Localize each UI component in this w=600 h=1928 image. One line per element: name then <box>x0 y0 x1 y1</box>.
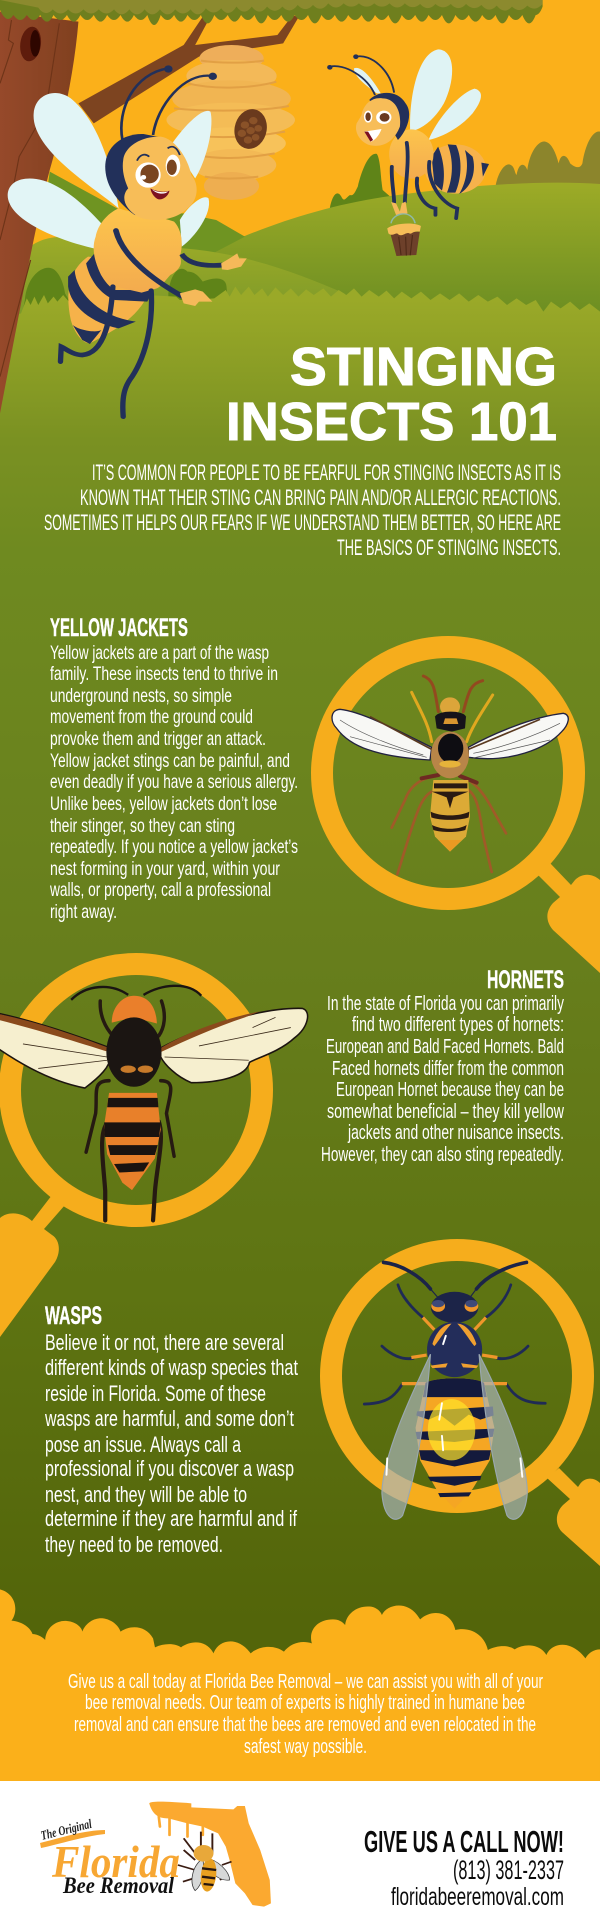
text block: yellow jackets description: right away. <box>50 901 117 923</box>
magnifying glass: hornet <box>0 964 262 1337</box>
text block: yellow jackets description: Yellow jacket stings can be painful, and <box>50 750 290 772</box>
abdomen <box>425 144 486 194</box>
illustration: wasp insect <box>364 1262 545 1519</box>
beehive <box>166 45 295 200</box>
legs <box>86 1001 174 1220</box>
logo swoosh <box>40 1830 105 1848</box>
face <box>135 147 180 199</box>
legs <box>60 287 152 417</box>
text block: yellow jackets description: family. These insects tend to thrive in <box>50 663 278 685</box>
thorax <box>389 129 434 179</box>
abdomen <box>430 780 470 852</box>
intro paragraph <box>44 460 561 560</box>
illustration: hornet insect <box>0 986 308 1220</box>
grass ridge <box>0 287 600 337</box>
thorax <box>427 1322 482 1377</box>
fluffy thorax <box>94 208 182 293</box>
antennae <box>121 68 212 140</box>
antennae <box>383 1262 527 1299</box>
text block: yellow jackets description: movement from the ground could <box>50 706 253 728</box>
tree branch <box>78 15 298 123</box>
arm right <box>182 254 224 265</box>
text block: yellow jackets description: walls, or property, call a professional <box>49 879 271 901</box>
text block: wasps description: they need to be removed. <box>45 1532 223 1557</box>
panel: hornets text <box>321 966 564 1166</box>
panel: wasps text <box>44 1302 299 1557</box>
hands <box>180 253 247 306</box>
text block: wasps description: determine if they are harmful and if <box>45 1506 298 1531</box>
head <box>431 1292 478 1323</box>
magnifying glass: yellow jacket <box>322 647 600 973</box>
small flying bee <box>327 49 489 256</box>
antennae <box>71 986 201 1000</box>
heading: wasps: WASPS <box>45 1302 102 1330</box>
right hill <box>207 183 600 320</box>
antennae <box>330 56 394 95</box>
text block: yellow jackets description: underground nests, so simple <box>50 685 232 707</box>
wings <box>0 1008 308 1088</box>
magnifying glass: wasp <box>331 1250 600 1566</box>
thorax <box>431 732 469 778</box>
logo: Florida Bee Removal: Florida <box>51 1836 180 1887</box>
head <box>112 996 157 1023</box>
abdomen <box>416 1378 494 1509</box>
honey bucket <box>387 214 421 256</box>
abdomen <box>104 1093 161 1190</box>
bushes beside big bee <box>23 268 228 310</box>
heading: yellow jackets: YELLOW JACKETS <box>50 614 188 642</box>
text block: yellow jackets description: Unlike bees, yellow jackets don’t lose <box>50 793 277 815</box>
back left hill <box>46 172 245 267</box>
text block: hornets description <box>321 993 564 1166</box>
wings <box>354 49 481 140</box>
text block: yellow jackets description: provoke them and trigger an attack. <box>50 728 266 750</box>
dark green bush behind hill <box>329 154 394 217</box>
text block: yellow jackets description <box>49 642 298 923</box>
text block: yellow jackets description: Yellow jackets are a part of the wasp <box>50 642 269 664</box>
text block: wasps description: different kinds of wasp species that <box>45 1355 299 1380</box>
title: INSECTS 101 <box>226 392 557 452</box>
logo: Florida Bee Removal <box>39 1802 271 1907</box>
tree trunk <box>0 12 78 413</box>
abdomen <box>68 257 151 343</box>
text block: yellow jackets description: even deadly if you have a serious allergy. <box>50 771 298 793</box>
legs <box>364 1285 545 1404</box>
olive bushes on horizon <box>496 132 600 193</box>
illustration: yellow jacket insect <box>332 676 568 874</box>
wings <box>8 93 211 248</box>
text block: wasps description <box>44 1330 299 1557</box>
translucent wings <box>382 1354 527 1519</box>
hive entrance <box>232 107 270 151</box>
hero illustration scene <box>0 0 600 417</box>
text block: wasps description: pose an issue. Always call a <box>45 1432 241 1457</box>
text block: yellow jackets description: nest forming in your yard, within your <box>50 858 280 880</box>
panel: yellow jackets text <box>49 614 298 923</box>
call to action text <box>68 1671 543 1758</box>
big bee <box>8 65 247 417</box>
limbs <box>392 143 457 218</box>
title <box>226 337 557 452</box>
logo bee <box>178 1832 232 1892</box>
thorax <box>106 1017 161 1087</box>
text block: wasps description: reside in Florida. Some of these <box>45 1381 266 1406</box>
head <box>105 134 161 217</box>
tree hole <box>18 26 43 62</box>
title: STINGING <box>290 337 557 397</box>
text block: wasps description: professional if you discover a wasp <box>45 1456 294 1481</box>
logo: Florida Bee Removal: Bee Removal <box>62 1873 175 1898</box>
footer: white contact strip <box>0 1781 600 1928</box>
text block: wasps description: wasps are harmful, and some don’t <box>44 1406 295 1431</box>
left hill <box>15 237 344 327</box>
footer band: scalloped orange call to action <box>0 1589 600 1782</box>
contact details <box>364 1824 564 1911</box>
hands <box>391 202 408 215</box>
head <box>440 697 460 716</box>
text block: wasps description: nest, and they will be able to <box>45 1482 247 1507</box>
text block: yellow jackets description: their stinger, so they can sting <box>50 815 235 837</box>
head <box>369 93 409 140</box>
arm left <box>116 231 182 296</box>
logo text: The Original <box>39 1816 93 1843</box>
legs <box>392 676 506 874</box>
tree canopy <box>0 0 543 25</box>
wings <box>332 709 568 760</box>
text block: wasps description: Believe it or not, there are several <box>45 1330 284 1355</box>
background: green gradient field <box>0 300 600 1790</box>
call to action text: safest way possible. <box>244 1736 367 1758</box>
background: sky <box>0 0 600 320</box>
logo map of Florida <box>149 1802 271 1907</box>
text block: yellow jackets description: repeatedly. If you notice a yellow jacket’s <box>50 836 298 858</box>
